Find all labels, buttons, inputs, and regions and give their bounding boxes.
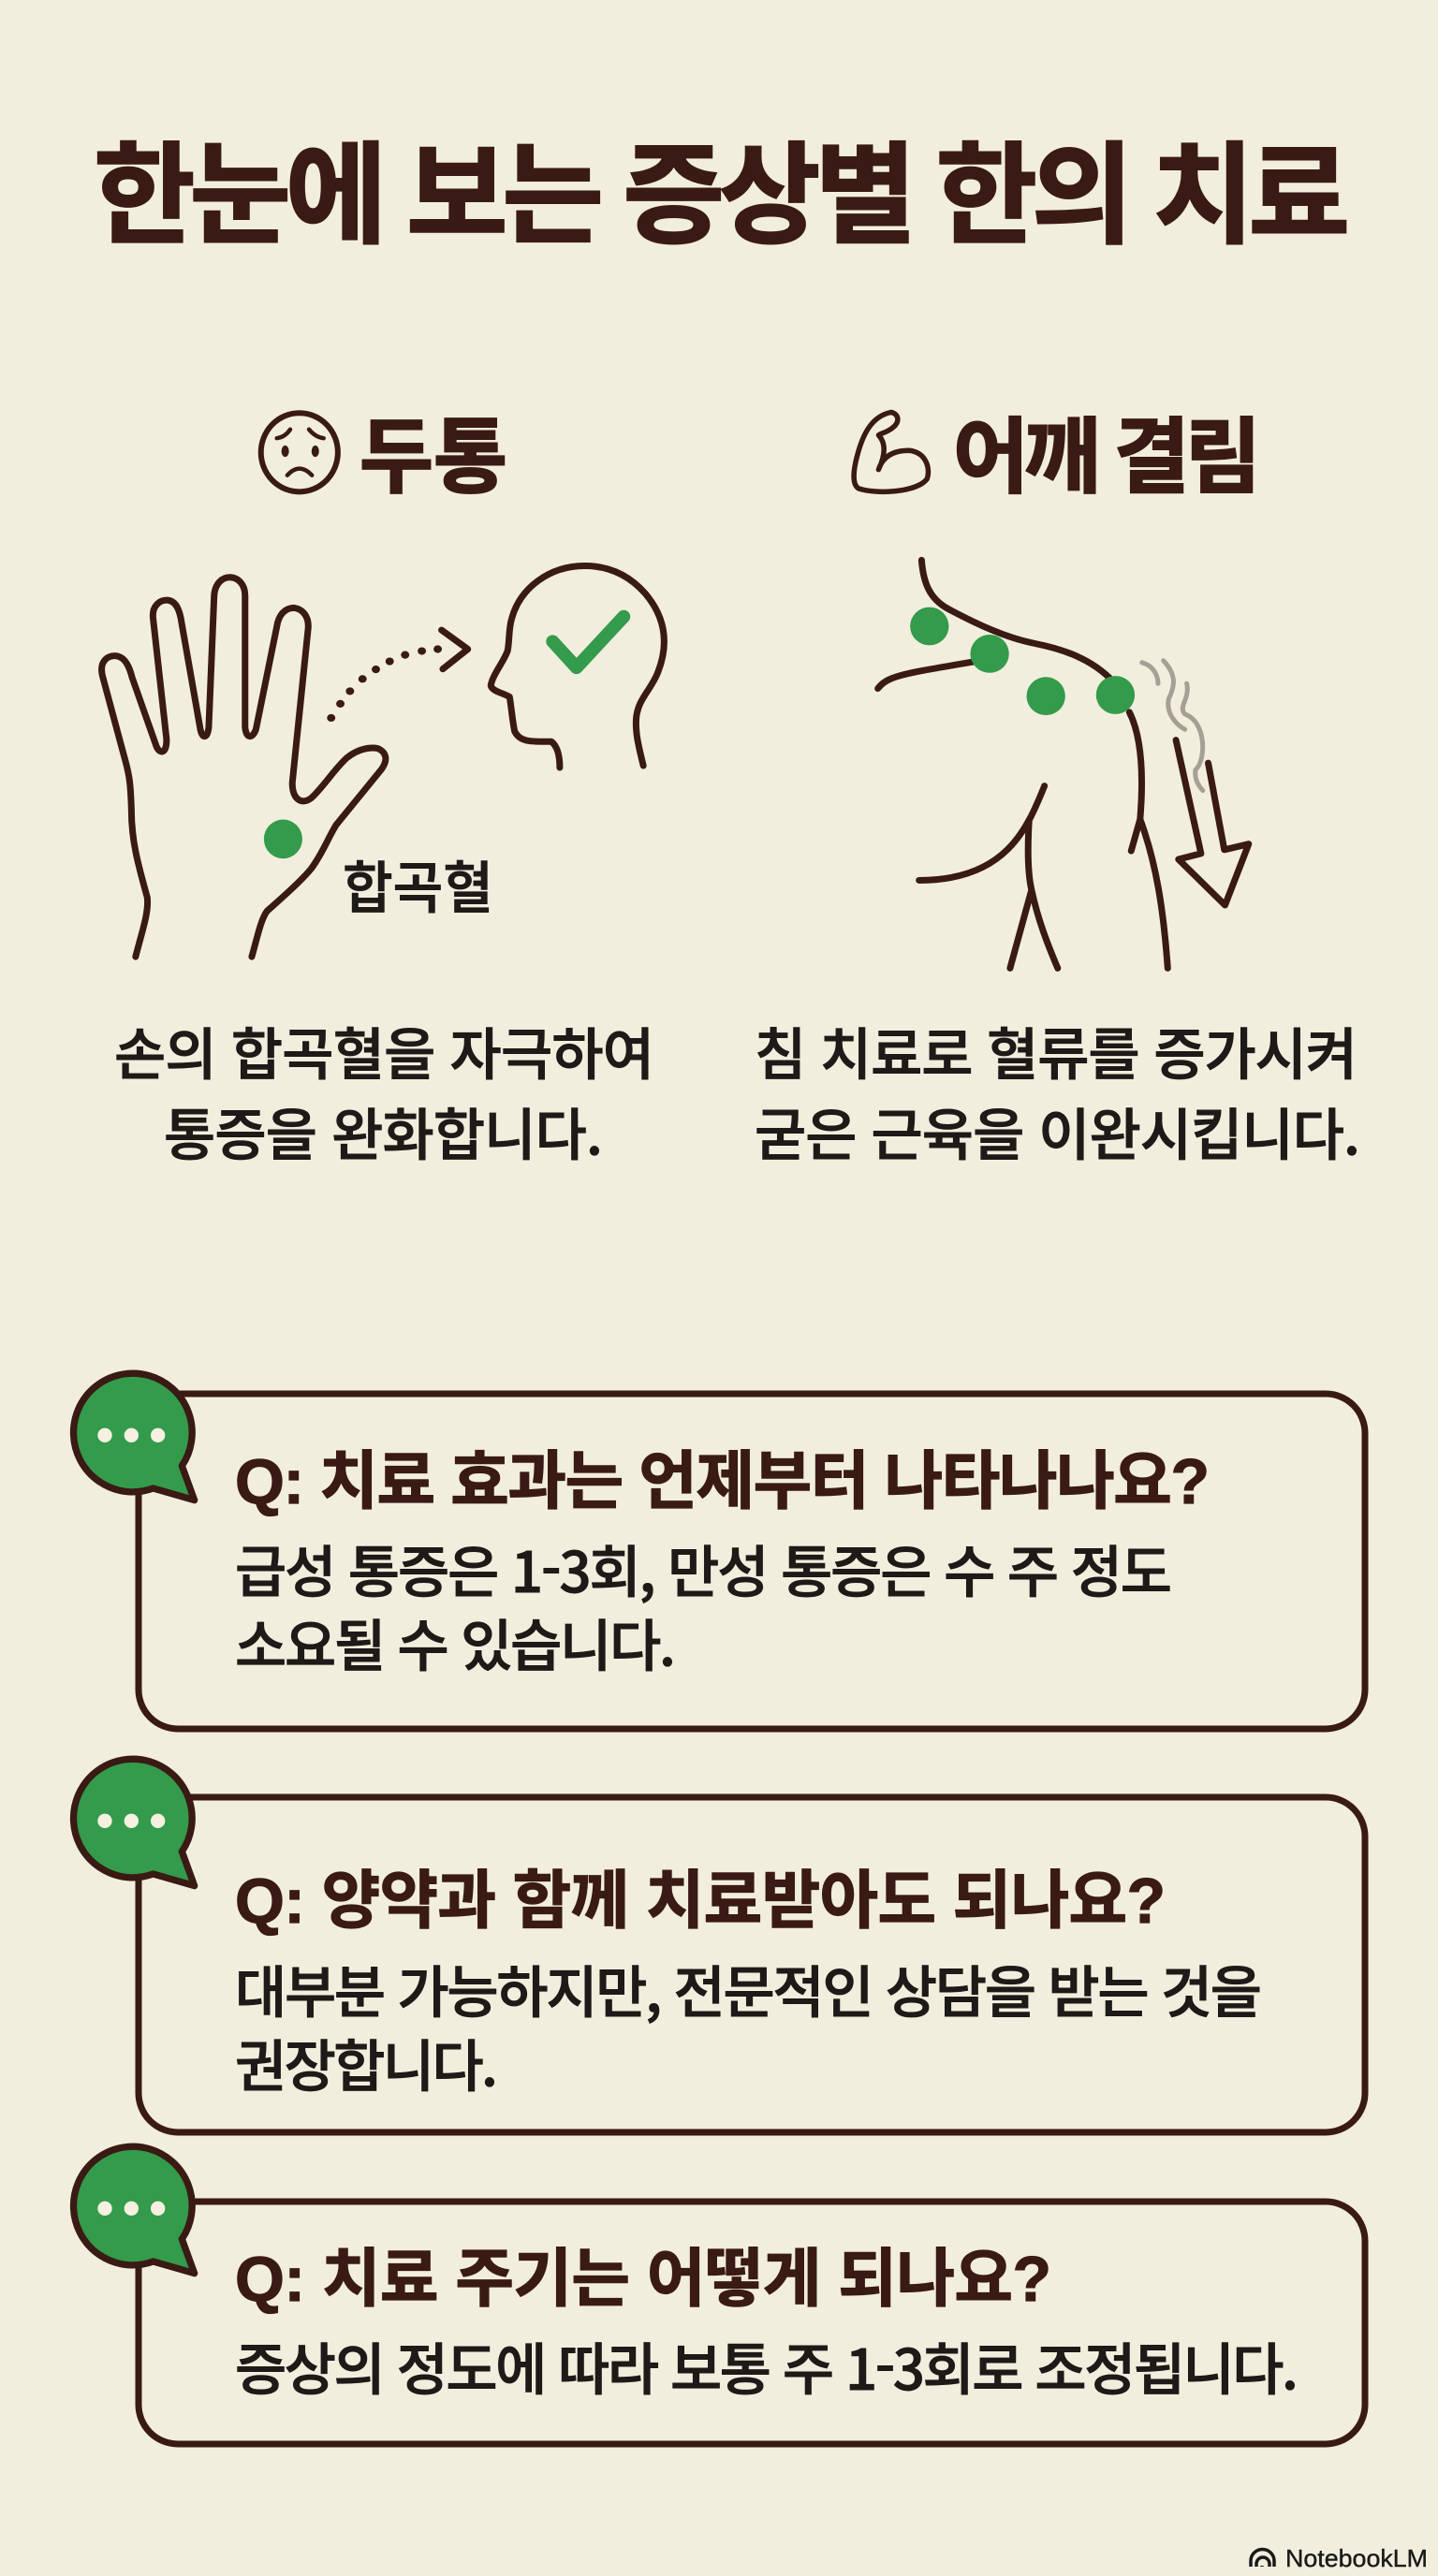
watermark: NotebookLM xyxy=(1251,2544,1428,2572)
answer 2 xyxy=(235,1948,1262,2103)
question 3: Q: 치료 주기는 어떻게 되나요? xyxy=(235,2244,1051,2315)
panel: FAQ 2 xyxy=(74,1759,1365,2132)
tension wisp xyxy=(1142,661,1203,791)
icon: worried face xyxy=(261,413,338,491)
answer 1 xyxy=(235,1528,1172,1683)
check mark xyxy=(552,617,624,667)
answer 2: 대부분 가능하지만, 전문적인 상담을 받는 것을 xyxy=(235,1948,1262,2029)
arrow: down xyxy=(1176,740,1249,905)
description: headache xyxy=(114,1010,654,1172)
icon: speech bubble 2 xyxy=(74,1759,195,1886)
description: headache: 통증을 완화합니다. xyxy=(164,1090,603,1172)
heading text: shoulder stiffness: 어깨 결림 xyxy=(953,411,1261,504)
answer 3: 증상의 정도에 따라 보통 주 1-3회로 조정됩니다. xyxy=(235,2325,1299,2407)
acupoint marker xyxy=(264,820,302,858)
acupoint markers xyxy=(910,607,1135,715)
answer 1: 소요될 수 있습니다. xyxy=(235,1602,676,1683)
heading: headache xyxy=(261,411,507,504)
illustration: shoulder with acupoints xyxy=(878,560,1249,968)
icon: NotebookLM logo xyxy=(1251,2549,1274,2567)
label: hapgok point: 합곡혈 xyxy=(343,843,493,925)
wordmark: NotebookLM xyxy=(1285,2544,1428,2572)
title: 한눈에 보는 증상별 한의 치료 xyxy=(94,135,1350,258)
icon: speech bubble 1 xyxy=(74,1373,195,1500)
illustration: head with check xyxy=(491,566,664,768)
arrow: dotted hand to head xyxy=(327,630,468,722)
panel: FAQ 3 xyxy=(74,2146,1365,2444)
illustration: hand with acupoint xyxy=(102,578,386,957)
heading: shoulder stiffness xyxy=(854,411,1261,504)
panel: FAQ 1 xyxy=(74,1373,1365,1729)
answer 1: 급성 통증은 1-3회, 만성 통증은 수 주 정도 xyxy=(235,1528,1172,1609)
answer 2: 권장합니다. xyxy=(235,2022,498,2103)
description: shoulder stiffness: 침 치료로 혈류를 증가시켜 xyxy=(755,1010,1357,1091)
description: shoulder stiffness: 굳은 근육을 이완시킵니다. xyxy=(755,1090,1360,1172)
icon: speech bubble 3 xyxy=(74,2146,195,2274)
question 1: Q: 치료 효과는 언제부터 나타나나요? xyxy=(235,1446,1210,1517)
question 2: Q: 양약과 함께 치료받아도 되나요? xyxy=(235,1866,1166,1937)
panel: shoulder stiffness xyxy=(755,411,1360,1172)
heading text: headache: 두통 xyxy=(360,411,507,504)
panel: headache xyxy=(102,411,664,1172)
icon: flexed arm xyxy=(854,412,928,491)
description: shoulder stiffness xyxy=(755,1010,1360,1172)
description: headache: 손의 합곡혈을 자극하여 xyxy=(114,1010,654,1091)
